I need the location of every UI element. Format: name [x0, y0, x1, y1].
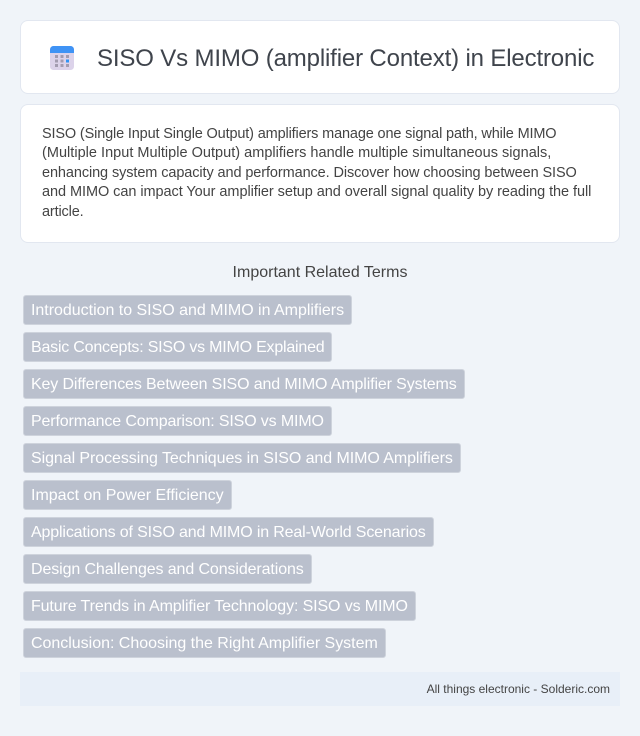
footer: All things electronic - Solderic.com	[427, 682, 610, 696]
tag 10: Conclusion: Choosing the Right Amplifier System	[31, 635, 378, 652]
summary text: SISO (Single Input Single Output) amplifiers manage one signal path, while MIMO	[42, 126, 556, 142]
title: SISO Vs MIMO (amplifier Context) in Electronic	[97, 45, 594, 72]
tag 2: Basic Concepts: SISO vs MIMO Explained	[31, 339, 324, 356]
summary text: article.	[42, 204, 84, 220]
tag 6	[23, 480, 232, 510]
tag 3	[23, 369, 465, 399]
header card	[20, 20, 620, 94]
tag 2	[23, 332, 332, 362]
tag 1	[23, 295, 352, 325]
summary card	[20, 104, 620, 243]
tag 7: Applications of SISO and MIMO in Real-World Scenarios	[31, 524, 426, 541]
tag 4	[23, 406, 332, 436]
tag 1: Introduction to SISO and MIMO in Amplifiers	[31, 302, 344, 319]
summary text	[42, 126, 591, 220]
section heading: Important Related Terms	[233, 264, 407, 281]
tag 8	[23, 554, 312, 584]
tag 10	[23, 628, 386, 658]
footer	[20, 672, 620, 706]
summary text: (Multiple Input Multiple Output) amplifiers handle multiple simultaneous signals,	[42, 145, 551, 161]
tag 5: Signal Processing Techniques in SISO and MIMO Amplifiers	[31, 450, 453, 467]
tag 4: Performance Comparison: SISO vs MIMO	[31, 413, 324, 430]
tag list	[23, 295, 465, 658]
tag 9	[23, 591, 416, 621]
tag 9: Future Trends in Amplifier Technology: SISO vs MIMO	[31, 598, 408, 615]
icon: calendar	[50, 46, 74, 70]
tag 6: Impact on Power Efficiency	[31, 487, 224, 504]
tag 8: Design Challenges and Considerations	[31, 561, 304, 578]
tag 5	[23, 443, 461, 473]
summary text: and MIMO can impact Your amplifier setup and overall signal quality by reading the full	[42, 184, 591, 200]
summary text: enhancing system capacity and performance. Discover how choosing between SISO	[42, 165, 577, 181]
tag 3: Key Differences Between SISO and MIMO Amplifier Systems	[31, 376, 457, 393]
tag 7	[23, 517, 434, 547]
